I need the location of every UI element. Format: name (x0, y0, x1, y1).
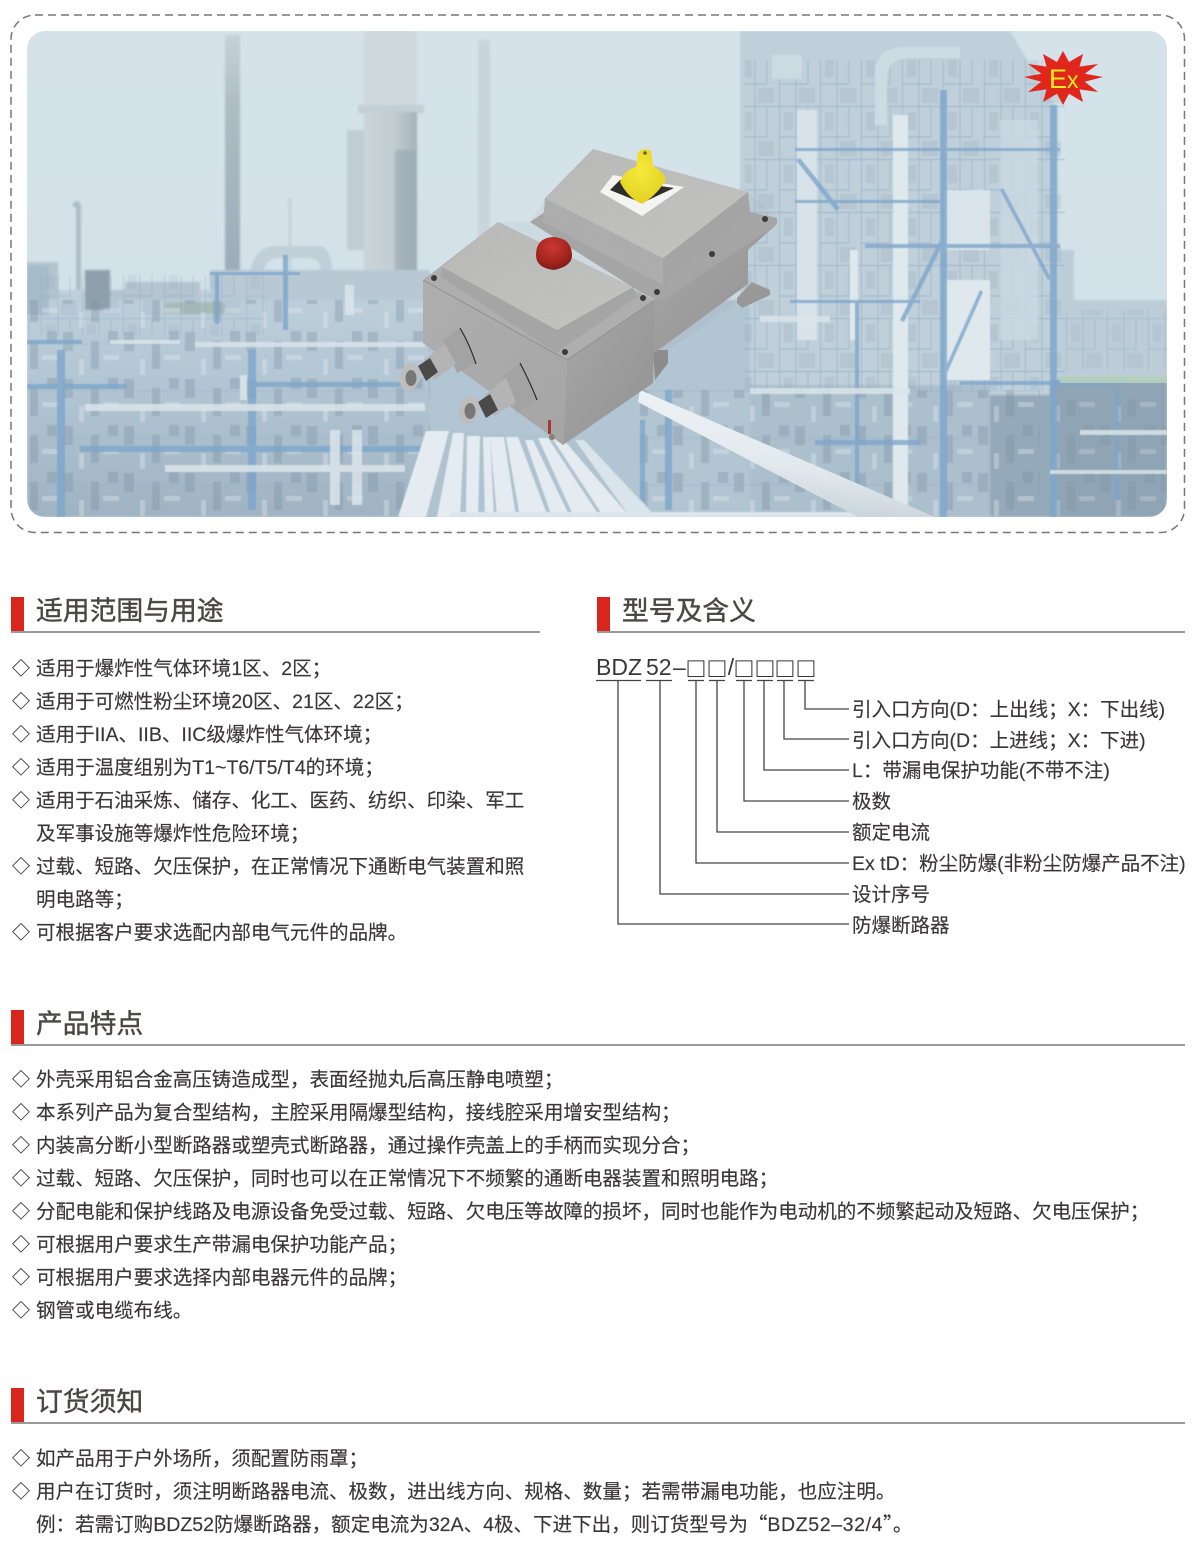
panel: product features: ◇ (12, 1268, 30, 1288)
icon: Ex explosion star: x (1067, 67, 1079, 93)
leader labels: L：带漏电保护功能(不带不注) (852, 760, 1110, 782)
yellow knob (620, 149, 666, 204)
leader labels (852, 699, 1186, 937)
panel: scope and use: 及军事设施等爆炸性危险环境； (36, 823, 309, 845)
panel: scope and use: ◇ (12, 857, 30, 877)
panel: product features: ◇ (12, 1136, 30, 1156)
panel: scope and use: 适用于爆炸性气体环境1区、2区； (36, 658, 331, 680)
panel: product features: 可根据用户要求生产带漏电保护功能产品； (36, 1234, 407, 1256)
section marker (11, 597, 24, 632)
panel: scope and use: 明电路等； (36, 889, 134, 911)
heading: 产品特点 (36, 1009, 143, 1039)
screws (431, 216, 768, 355)
leader labels: 极数 (852, 791, 891, 813)
panel: scope and use: 适用于IIA、IIB、IIC级爆炸性气体环境； (36, 724, 382, 746)
grain overlay (423, 149, 777, 445)
heading: 订货须知 (36, 1387, 143, 1417)
heading: 适用范围与用途 (36, 596, 224, 626)
panel: scope and use: 可根据客户要求选配内部电气元件的品牌。 (36, 922, 407, 944)
chimneys and columns on the left (225, 35, 240, 275)
model code: 52 (646, 654, 672, 680)
lattice and plant detail (27, 60, 1167, 517)
model code: □ (757, 652, 774, 683)
heading: 型号及含义 (622, 596, 756, 626)
list item (12, 1234, 407, 1256)
panel: product features (11, 1009, 1185, 1322)
list item (12, 658, 331, 680)
product: explosion-proof breaker enclosure (397, 149, 777, 445)
model code: □ (688, 652, 705, 683)
list item (12, 790, 524, 845)
panel: product features: 分配电能和保护线路及电源设备免受过载、短路、欠电压等故障的损坏，同时也能作为电动机的不频繁起动及短路、欠电压保护； (36, 1201, 1149, 1223)
panel: ordering notes: 例：若需订购BDZ52防爆断路器，额定电流为32A、4极、下进下出，则订货型号为“BDZ52–32/4”。 (36, 1508, 912, 1537)
model code: / (728, 654, 735, 680)
list item (12, 1448, 368, 1470)
list item (12, 1135, 700, 1157)
pale horizontal pipes (85, 285, 1167, 505)
rear box body (653, 224, 777, 354)
front box (423, 280, 567, 445)
white pipe bundle (398, 430, 880, 517)
rear lid top (545, 149, 748, 258)
leader lines (596, 680, 849, 924)
red indicator lamp (536, 237, 572, 270)
list item (12, 724, 382, 746)
panel: product features: ◇ (12, 1070, 30, 1090)
list item (12, 856, 524, 911)
section marker (11, 1010, 24, 1045)
section marker (597, 597, 610, 632)
panel: scope and use: ◇ (12, 659, 30, 679)
icon: Ex explosion star (1024, 51, 1103, 105)
panel: product features: ◇ (12, 1235, 30, 1255)
panel: ordering notes: 用户在订货时，须注明断路器电流、极数，进出线方向、规格、数量；若需带漏电功能，也应注明。 (36, 1481, 895, 1503)
model code: – (673, 654, 686, 680)
section marker (11, 1388, 24, 1423)
white switch plate (600, 175, 684, 216)
panel: product features: ◇ (12, 1301, 30, 1321)
panel: product features: 可根据用户要求选择内部电器元件的品牌； (36, 1267, 407, 1289)
right plant mass (740, 31, 1058, 400)
list item (12, 922, 407, 944)
panel: product features: 内装高分断小型断路器或塑壳式断路器，通过操作壳盖上的手柄而实现分合； (36, 1135, 700, 1157)
panel: model meaning (597, 596, 1185, 633)
leader labels: 防爆断路器 (852, 915, 950, 937)
model code: BDZ (596, 654, 642, 680)
list item (12, 757, 384, 779)
rear lid sides (543, 198, 663, 285)
leader labels: 设计序号 (852, 884, 930, 906)
panel: ordering notes: ◇ (12, 1482, 30, 1502)
heading rule (11, 631, 540, 633)
panel: scope and use: ◇ (12, 758, 30, 778)
panel: ordering notes: ◇ (12, 1449, 30, 1469)
diagram: model code breakdown (596, 652, 1186, 937)
sky (27, 31, 1167, 517)
panel: ordering notes (11, 1387, 1185, 1537)
panel: product features: ◇ (12, 1169, 30, 1189)
panel: scope and use: ◇ (12, 923, 30, 943)
rear box mounting tabs (737, 282, 770, 308)
panel: scope and use: 适用于可燃性粉尘环境20区、21区、22区； (36, 691, 414, 713)
list item (12, 691, 414, 713)
rear flange (530, 212, 777, 302)
pale process columns (772, 47, 1038, 505)
heading rule (11, 1044, 1185, 1046)
panel: scope and use: 适用于温度组别为T1~T6/T5/T4的环境； (36, 757, 384, 779)
leader labels: 引入口方向(D：上进线；X：下进) (852, 730, 1146, 752)
panel: scope and use: ◇ (12, 692, 30, 712)
list item (12, 1102, 681, 1124)
list item (12, 1481, 912, 1537)
list item (12, 1069, 563, 1091)
leader labels: 额定电流 (852, 822, 930, 844)
model code (596, 652, 815, 683)
model code: □ (736, 652, 753, 683)
list item (12, 1300, 192, 1322)
heading rule (11, 1422, 1185, 1424)
model code: □ (777, 652, 794, 683)
panel: product features: 外壳采用铝合金高压铸造成型，表面经抛丸后高压静电喷塑； (36, 1069, 563, 1091)
panel: product features: ◇ (12, 1202, 30, 1222)
leader labels: 引入口方向(D：上出线；X：下出线) (852, 699, 1165, 721)
model code: □ (798, 652, 815, 683)
model code: □ (709, 652, 726, 683)
panel: scope and use: 过载、短路、欠压保护，在正常情况下通断电气装置和照 (36, 856, 524, 878)
large diagonal pipe (638, 390, 935, 517)
panel: product features: ◇ (12, 1103, 30, 1123)
heading rule (597, 631, 1185, 633)
panel: product features: 本系列产品为复合型结构，主腔采用隔爆型结构，接线腔采用增安型结构； (36, 1102, 681, 1124)
cable glands (397, 328, 537, 426)
blue steel pipework (27, 90, 1125, 517)
icon: Ex explosion star: E (1049, 64, 1067, 94)
far plant and ground (27, 31, 1167, 517)
list item (12, 1168, 778, 1190)
panel: scope and use: ◇ (12, 725, 30, 745)
list item (12, 1201, 1149, 1223)
hero frame: dashed rounded border (10, 14, 1186, 534)
panel: scope and use (11, 596, 540, 944)
list item (12, 1267, 407, 1289)
panel: product features: 钢管或电缆布线。 (36, 1300, 192, 1322)
panel: ordering notes: 如产品用于户外场所，须配置防雨罩； (36, 1448, 368, 1470)
panel: scope and use: 适用于石油采炼、储存、化工、医药、纺织、印染、军工 (36, 790, 524, 812)
panel: scope and use: ◇ (12, 791, 30, 811)
leader labels: Ex tD：粉尘防爆(非粉尘防爆产品不注) (852, 853, 1186, 875)
hero image: refinery scene with product (27, 31, 1167, 517)
panel: product features: 过载、短路、欠压保护，同时也可以在正常情况下不频繁的通断电器装置和照明电路； (36, 1168, 778, 1190)
